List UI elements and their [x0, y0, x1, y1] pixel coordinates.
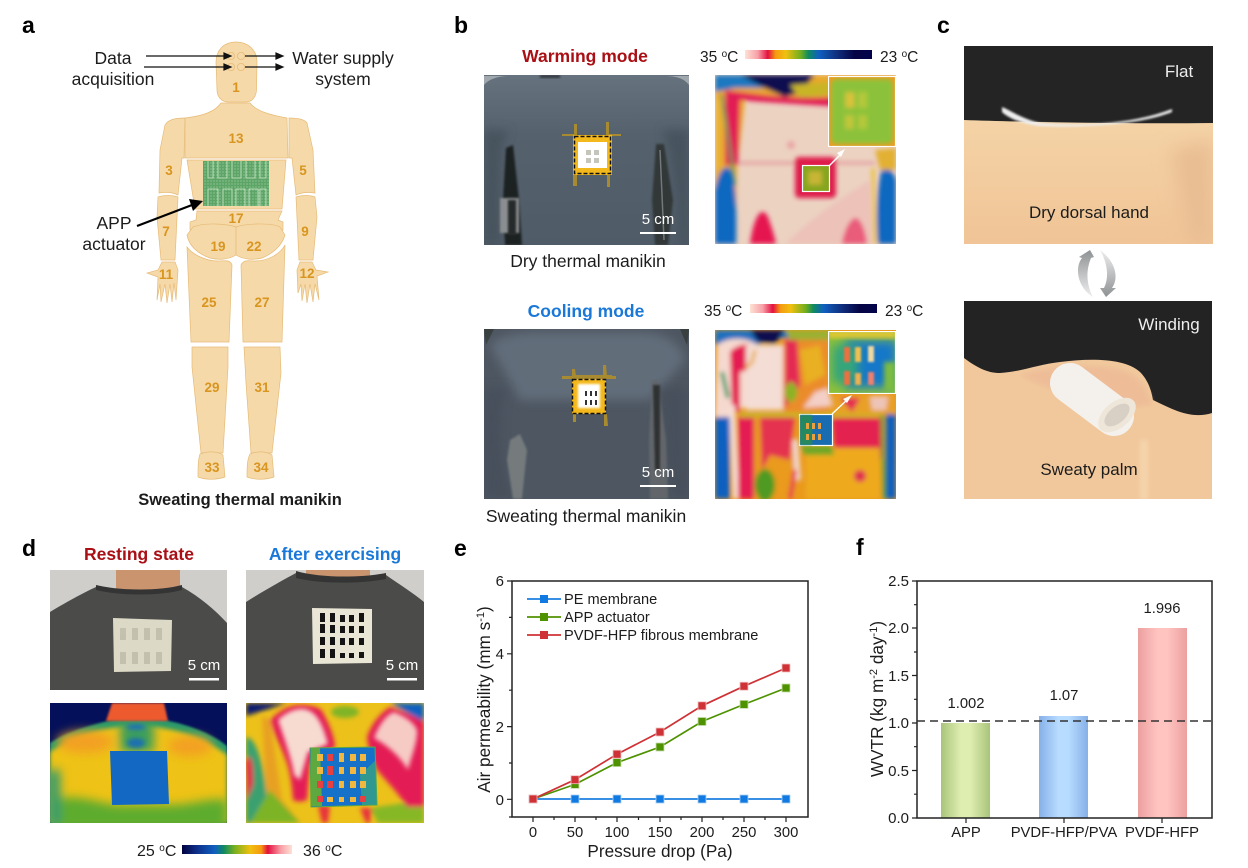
y tick labels: 2 — [496, 719, 504, 736]
category labels: APP — [951, 825, 981, 841]
legend: APP actuator — [564, 610, 650, 626]
panel label a: a — [22, 12, 35, 38]
colour scale warming — [700, 49, 918, 66]
colour scale — [137, 843, 342, 860]
body zone numbers: 17 — [228, 211, 244, 226]
y axis title: WVTR (kg m — [867, 679, 887, 777]
y axis title: -1 — [475, 612, 487, 622]
caption: sweating thermal manikin: Sweating thermal manikin — [138, 491, 342, 509]
panel b: thermal images — [454, 12, 923, 526]
body zone numbers: 19 — [210, 239, 226, 254]
body zone numbers: 9 — [301, 224, 309, 239]
plot frame and ticks — [507, 581, 808, 822]
colour scale warming: o — [902, 49, 908, 60]
label: water supply system: Water supply — [292, 48, 394, 68]
y tick labels: 1.5 — [888, 668, 909, 685]
colour scale cooling: o — [726, 303, 732, 314]
thermal inset: cooling — [828, 331, 897, 394]
heading: resting state: Resting state — [84, 544, 194, 564]
scale bar: 5 cm — [642, 211, 674, 228]
panel d: wearable demonstration — [22, 535, 424, 860]
colour scale warming: C — [907, 49, 918, 66]
label: water supply system: system — [315, 69, 371, 89]
colour scale cooling: o — [907, 303, 913, 314]
label: sweaty palm: Sweaty palm — [1040, 460, 1138, 479]
category labels: PVDF-HFP — [1125, 825, 1199, 841]
body zone numbers: 33 — [204, 460, 220, 475]
colour scale: o — [325, 843, 331, 854]
panel e: air permeability chart — [454, 535, 808, 861]
value labels — [947, 601, 1181, 712]
x tick labels: 200 — [690, 825, 714, 841]
x tick labels — [529, 825, 798, 841]
x tick labels: 250 — [732, 825, 756, 841]
y axis title: ) — [867, 621, 887, 627]
panel label b: b — [454, 12, 468, 38]
body zone numbers: 13 — [228, 131, 244, 146]
y tick labels: 2.5 — [888, 573, 909, 590]
icon: reversible arrows — [1078, 250, 1116, 297]
y axis title: ) — [474, 606, 494, 612]
y axis title: -2 — [868, 669, 880, 679]
colour scale: 25 — [137, 843, 155, 860]
body zone numbers: 11 — [159, 267, 174, 282]
y axis title: -1 — [868, 627, 880, 636]
body zone numbers: 12 — [299, 266, 315, 281]
panel label d: d — [22, 535, 36, 561]
series: APP actuator — [533, 684, 790, 799]
y tick labels: 2.0 — [888, 620, 909, 637]
colour scale warming: C — [727, 49, 738, 66]
category labels — [951, 825, 1199, 841]
y tick labels: 0.5 — [888, 763, 909, 780]
colour scale: o — [159, 843, 165, 854]
x tick labels: 300 — [774, 825, 798, 841]
label: flat: Flat — [1165, 62, 1193, 81]
arrows: water supply system — [245, 53, 283, 70]
legend — [527, 592, 758, 644]
colour scale warming: 23 — [880, 49, 897, 66]
arrows: data acquisition — [144, 53, 231, 70]
panel label e: e — [454, 535, 467, 561]
callout arrow cooling — [832, 395, 852, 414]
body zone numbers: 22 — [246, 239, 262, 254]
thermal image: after exercising — [246, 703, 424, 823]
thermal image: cooling — [715, 330, 896, 501]
scale bar: 5 cm — [386, 657, 418, 674]
body zone numbers: 34 — [253, 460, 269, 475]
body zone numbers — [159, 80, 315, 475]
x tick labels: 50 — [567, 825, 583, 841]
scale bar — [640, 214, 676, 234]
x tick labels: 150 — [648, 825, 672, 841]
x tick labels: 100 — [605, 825, 629, 841]
heading: cooling mode: Cooling mode — [528, 301, 645, 321]
bars — [941, 628, 1187, 818]
caption: dry thermal manikin: Dry thermal manikin — [510, 251, 666, 271]
y tick labels — [496, 573, 504, 809]
colour scale: C — [165, 843, 176, 860]
photo: sweating thermal manikin — [484, 329, 689, 499]
arrow: APP actuator — [137, 199, 203, 226]
series: PE membrane — [529, 795, 790, 803]
photo: dry thermal manikin — [484, 75, 689, 245]
body zone numbers: 1 — [232, 80, 240, 95]
label: APP actuator: APP — [96, 213, 132, 233]
label: APP actuator: actuator — [82, 234, 146, 254]
label: data acquisition: acquisition — [72, 69, 154, 89]
panel a: sweating thermal manikin — [22, 12, 394, 509]
caption: sweating thermal manikin: Sweating thermal manikin — [486, 506, 686, 526]
APP actuator textile — [203, 161, 269, 206]
colour scale: 36 — [303, 843, 321, 860]
panel f: WVTR bar chart — [856, 534, 1212, 841]
panel label c: c — [937, 12, 950, 38]
scale bar: 5 cm — [188, 657, 220, 674]
scale bar: 5 cm — [642, 464, 674, 481]
x tick labels: 0 — [529, 825, 537, 841]
body zone numbers: 31 — [254, 380, 270, 395]
thermal image: warming — [715, 75, 896, 244]
y tick labels: 1.0 — [888, 715, 909, 732]
colour scale cooling — [704, 303, 923, 320]
legend: PVDF-HFP fibrous membrane — [564, 628, 758, 644]
y axis title: day — [867, 636, 887, 669]
y tick labels — [888, 573, 909, 827]
value labels: 1.996 — [1143, 601, 1181, 617]
thermal image: resting — [48, 703, 227, 830]
y axis title: Air permeability (mm s — [474, 622, 494, 793]
y tick labels: 6 — [496, 573, 504, 590]
photo: resting state — [50, 570, 227, 690]
colour scale cooling: 23 — [885, 303, 902, 320]
plot frame and ticks — [912, 581, 1212, 823]
photo: after exercising — [246, 570, 424, 690]
colour scale cooling: C — [731, 303, 742, 320]
value labels: 1.002 — [947, 696, 985, 712]
label: winding: Winding — [1138, 315, 1200, 334]
colour scale cooling: C — [912, 303, 923, 320]
series: PVDF-HFP fibrous membrane — [529, 664, 790, 803]
colour scale cooling: 35 — [704, 303, 721, 320]
body zone numbers: 5 — [299, 163, 307, 178]
body zone numbers: 25 — [201, 295, 217, 310]
label: data acquisition: Data — [95, 48, 132, 68]
photo: flat on dry dorsal hand — [964, 46, 1213, 244]
photo: winding on sweaty palm — [964, 301, 1212, 500]
callout arrow warming — [829, 149, 845, 166]
body zone numbers: 7 — [162, 224, 170, 239]
y tick labels: 0 — [496, 792, 504, 809]
body zone numbers: 29 — [204, 380, 220, 395]
reference dashed line — [917, 720, 1212, 722]
colour scale warming: 35 — [700, 49, 717, 66]
body zone numbers: 27 — [254, 295, 270, 310]
colour scale: C — [331, 843, 342, 860]
scale bar — [188, 660, 220, 680]
x axis title: Pressure drop (Pa) — [587, 841, 733, 861]
y tick labels: 0.0 — [888, 810, 909, 827]
body zone numbers: 3 — [165, 163, 173, 178]
category labels: PVDF-HFP/PVA — [1011, 825, 1117, 841]
panel c: flat and winding states — [937, 12, 1213, 500]
colour scale warming: o — [722, 49, 728, 60]
panel label f: f — [856, 534, 864, 560]
label: dry dorsal hand: Dry dorsal hand — [1029, 203, 1149, 222]
scale bar — [640, 467, 676, 487]
scale bar — [386, 660, 418, 680]
value labels: 1.07 — [1050, 688, 1078, 704]
legend: PE membrane — [564, 592, 657, 608]
y tick labels: 4 — [496, 646, 504, 663]
heading: warming mode: Warming mode — [522, 46, 648, 66]
manikin body — [147, 42, 328, 479]
heading: after exercising: After exercising — [269, 544, 401, 564]
thermal inset: warming — [828, 76, 896, 147]
